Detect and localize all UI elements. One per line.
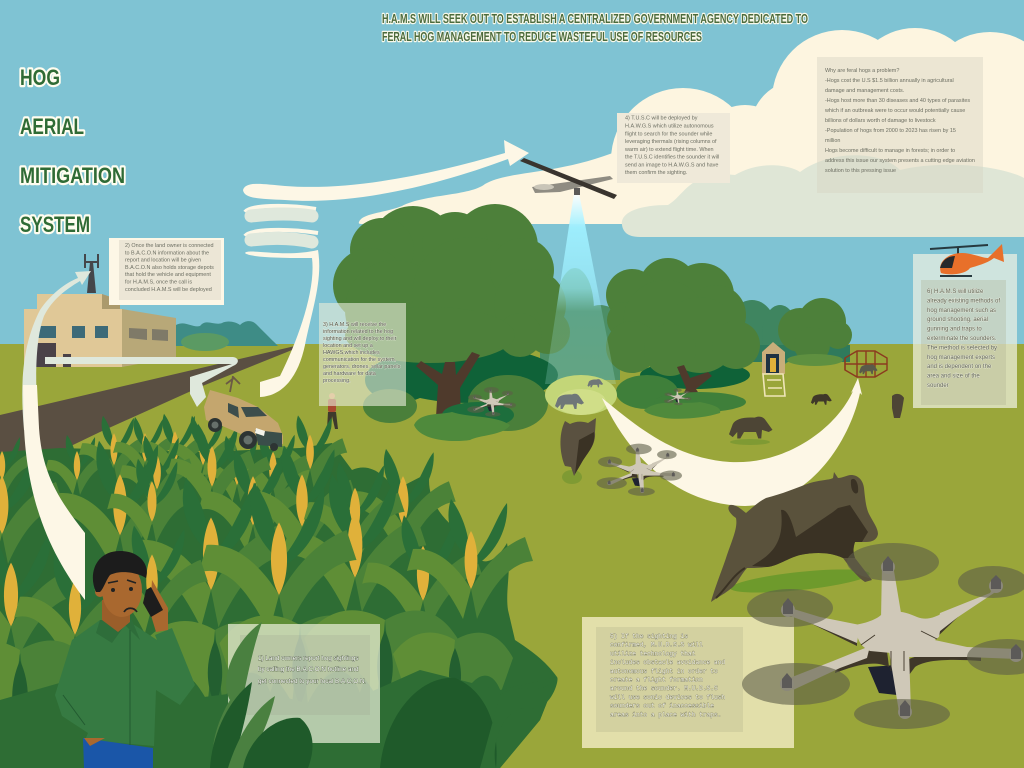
text box 3: HAWGS: 3) H.A.M.S will receive the [323, 322, 386, 328]
big hog shadow [729, 565, 871, 597]
text box 4: TUSC: the T.U.S.C identifies the sounder it will [625, 155, 719, 161]
text box 5: MUDSS: around the sounder. M.U.D.S.S [610, 685, 718, 692]
text box: why hogs are a problem: which if an outbreak were to occur would potentially cause [824, 108, 965, 114]
corn field [0, 414, 557, 768]
distant trees left [176, 321, 278, 351]
text box 5: MUDSS: 5) If the sighting is [610, 633, 688, 640]
fixed wing drone [520, 158, 617, 199]
text box 1: landowner: get connected to your local B.A.C.O.N. [258, 678, 366, 685]
hunting stand [762, 342, 785, 396]
corn plants front rows [0, 478, 533, 663]
foreground leaves [210, 622, 558, 768]
text box 2: BACON: for H.A.M.S, once the call is [125, 280, 192, 286]
text box 6: HAMS methods: 6) H.A.M.S will utilize [927, 289, 984, 295]
arrow: phone call to tower [22, 271, 91, 600]
hog running toward viewer [560, 418, 596, 484]
text box 5: MUDSS: create a flight formation [610, 676, 703, 684]
corn plants middle rows [0, 441, 456, 612]
text box 3: HAWGS: communication for the system, [323, 357, 397, 363]
road [0, 346, 302, 480]
text box 3: HAWGS: sighting and will deploy to their [323, 336, 397, 342]
radio tower [85, 254, 98, 293]
text box 2: BACON: concluded H.A.M.S will be deployed [125, 287, 212, 293]
arrow: sweep from scan spot to trap [602, 378, 862, 506]
system name heading: MITIGATION [20, 163, 125, 188]
system name heading [20, 65, 125, 237]
text box: why hogs are a problem: -Hogs host more than 30 diseases and 40 types of parasites [825, 98, 970, 104]
distant trees right [728, 300, 850, 365]
text box 2: BACON [109, 238, 224, 305]
gray hogs in scan spot [555, 379, 603, 409]
text box 3: HAWGS: HAWGS,which includes [323, 350, 380, 356]
text box 3: HAWGS: location and set up a [323, 343, 373, 349]
building with radio tower [24, 254, 176, 367]
text box 2: BACON: that hold the vehicle and equipment [125, 272, 211, 278]
text box 6: HAMS methods: area and size of the [927, 374, 980, 380]
text box 5: MUDSS: confirmed, M.U.D.S.S will [610, 642, 703, 649]
text box 6: HAMS methods: gunning and traps to [927, 327, 982, 333]
title: H.A.M.S WILL SEEK OUT TO ESTABLISH A CENTRALIZED GOVERNMENT AGENCY DEDICATED TO [382, 11, 808, 26]
main tree right [606, 258, 760, 419]
person beside box 3 [327, 393, 338, 429]
text box 4: TUSC: leveraging thermals (rising columns of [625, 139, 717, 145]
hog trap [845, 351, 887, 377]
big hog [711, 472, 878, 602]
corn plants back rows [0, 414, 347, 508]
distant hogs [811, 394, 904, 418]
text box: why hogs are a problem: address this issue our system presents a cutting edge aviation [825, 158, 975, 164]
text box: why hogs are a problem: Hogs become difficult to manage in forests; in order to [825, 148, 955, 154]
text box 5: MUDSS: utilize technology that [610, 650, 696, 657]
helicopter [930, 244, 1004, 276]
text box: why hogs are a problem: Why are feral hogs a problem? [825, 68, 899, 74]
distant trees centre [540, 268, 625, 380]
text box 4: TUSC: warm air) to extend flight time. When [624, 147, 714, 153]
text box 5: MUDSS: autonomous flight in order to [610, 668, 718, 675]
text box: why hogs are a problem: million [825, 138, 840, 144]
text box 6: HAMS methods: sounder [927, 383, 949, 389]
system name heading: SYSTEM [20, 212, 90, 237]
text box 6: HAMS methods: hog management such as [927, 308, 996, 314]
text box 3: HAWGS: information related to the hog [323, 329, 393, 335]
truck [204, 376, 283, 451]
text box 6: HAMS methods: and is dependent on the [927, 364, 992, 370]
ground [0, 344, 1024, 768]
text box 1: landowner: 1) Land owners report hog sightings [258, 655, 358, 662]
text box 1: landowner: by calling the B.A.C.O.N hotline and [258, 666, 359, 673]
text box 2: BACON: report and location will be given [125, 258, 201, 264]
title [382, 11, 808, 44]
text box 1: landowner [228, 624, 380, 743]
small hexacopters [467, 387, 692, 496]
text box: why hogs are a problem: -Population of hogs from 2000 to 2023 has risen by 15 [825, 128, 956, 134]
left tree shrubs [363, 375, 548, 441]
system name heading: HOG [20, 65, 60, 90]
text box 3: HAWGS: processing. [323, 378, 351, 384]
text box 3: HAWGS [319, 303, 406, 406]
text box: why hogs are a problem: damage and management costs. [825, 88, 905, 94]
small running hog [729, 417, 772, 445]
text box: why hogs are a problem: solution to this pressing issue [825, 168, 896, 174]
text box 5: MUDSS: areas into a place with traps. [610, 711, 721, 718]
text box: why hogs are a problem: -Hogs cost the U.S $1.5 billion annually in agricultural [825, 78, 954, 84]
pale green cloud [622, 155, 1024, 237]
text box 6: HAMS methods: hog management experts [927, 355, 995, 361]
text box 6: HAMS methods: The method is selected by [927, 345, 997, 351]
text box 6: HAMS methods: already existing methods of [927, 298, 1000, 304]
text box: why hogs are a problem [817, 57, 983, 193]
text box 4: TUSC: them confirm the sighting. [625, 170, 688, 176]
text box 4: TUSC: 4) T.U.S.C will be deployed by [625, 116, 698, 122]
arrow: ribbon from building to truck [45, 357, 238, 407]
text box 6: HAMS methods: ground shooting, aerial [927, 317, 988, 323]
text box 4: TUSC: H.A.W.G.S which utilize autonomous [625, 124, 714, 130]
text box 5: MUDSS: includes obstacle avoidance and [610, 659, 725, 666]
text box 4: TUSC [617, 113, 730, 183]
main tree left [333, 204, 570, 417]
text box 5: MUDSS [582, 617, 794, 748]
big hexacopter [742, 543, 1024, 729]
system name heading: AERIAL [20, 114, 84, 139]
text box 4: TUSC: flight to search for the sounder while [625, 131, 712, 137]
scan spot on the ground [545, 375, 617, 415]
text box 5: MUDSS: will use sonic devices to flush [610, 694, 725, 701]
text box 6: HAMS methods [913, 254, 1017, 408]
text box 4: TUSC: send an image to H.A.W.G.S and have [625, 162, 718, 168]
large cream cloud [359, 28, 1024, 232]
text box 2: BACON: to B.A.C.O.N information about the [125, 250, 209, 256]
text box 2: BACON: B.A.C.O.N also holds storage depots [125, 265, 214, 271]
farmer on phone [55, 551, 195, 768]
text box 3: HAWGS: generators, drones, solar panels [323, 364, 401, 370]
sky background [0, 0, 1024, 350]
scanning beam from drone [545, 193, 616, 384]
text box 3: HAWGS: and hardware for data [323, 371, 376, 377]
corn lower leaves [0, 610, 513, 731]
text box 2: BACON: 2) Once the land owner is connected [125, 243, 214, 249]
tree right small [778, 298, 852, 366]
text box 5: MUDSS: sounders out of inaccessible [610, 703, 714, 710]
text box: why hogs are a problem: billions of dollars worth of damage to livestock [825, 118, 936, 124]
title: FERAL HOG MANAGEMENT TO REDUCE WASTEFUL USE OF RESOURCES [382, 29, 702, 44]
arrow: ribbon from truck through spiral to drone [243, 140, 529, 397]
text box 6: HAMS methods: exterminate the sounders. [927, 336, 997, 342]
